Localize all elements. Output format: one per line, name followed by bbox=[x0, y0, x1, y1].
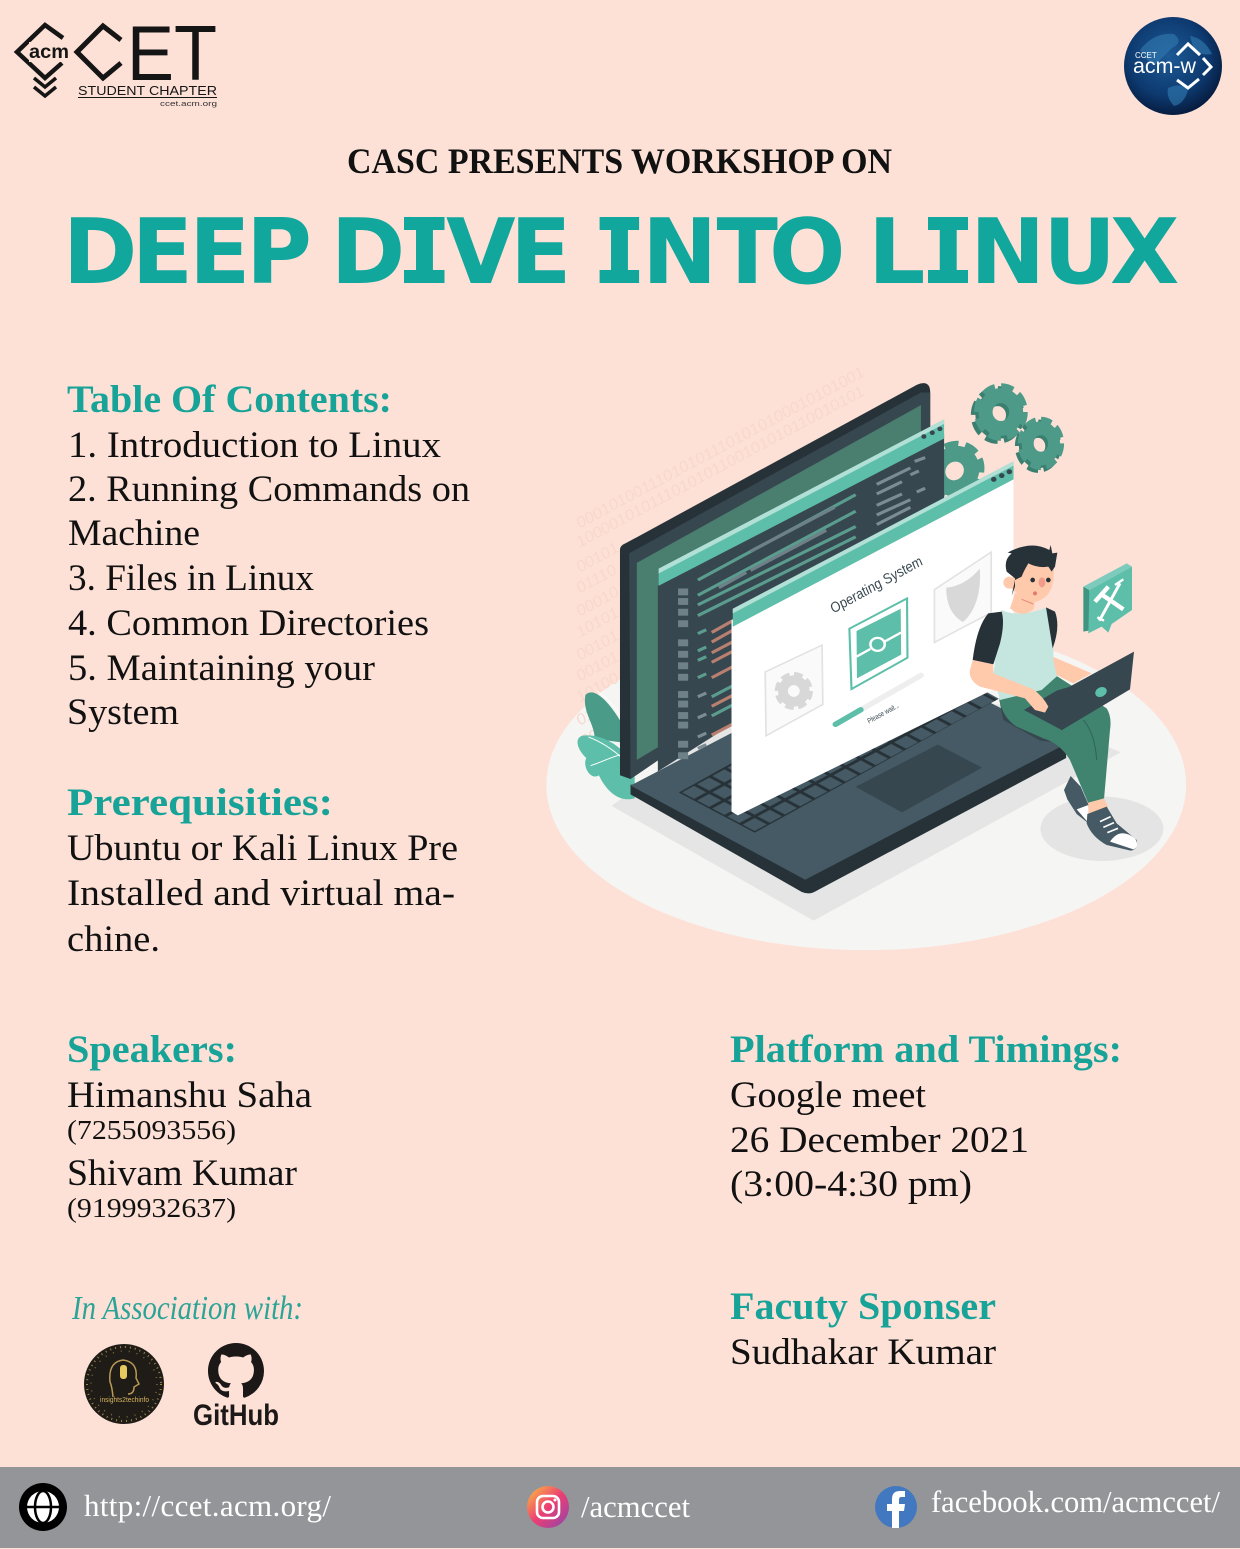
binary digits background: 01110 bbox=[573, 562, 620, 597]
list of topics: 2. Running Commands on bbox=[68, 469, 470, 510]
thigh shadow on laptop bbox=[999, 700, 1067, 743]
speaker one: (7255093556) bbox=[67, 1115, 236, 1145]
speaker two: Shivam Kumar bbox=[67, 1153, 297, 1194]
heading: faculty sponsor: Facuty Sponser bbox=[730, 1285, 996, 1328]
platform details: 26 December 2021 bbox=[730, 1120, 1029, 1161]
icon: gear box bbox=[765, 645, 823, 736]
subtitle: CASC PRESENTS WORKSHOP ON bbox=[347, 141, 892, 181]
icon: central system box bbox=[849, 598, 907, 689]
progress bar bbox=[835, 675, 921, 725]
sleeve bbox=[973, 612, 1003, 664]
code lines bbox=[698, 458, 925, 748]
title: DEEP DIVE INTO LINUX bbox=[63, 200, 1179, 305]
binary digits background: 001 bbox=[577, 722, 611, 750]
binary digits background: 00101 bbox=[573, 627, 622, 664]
binary digits background bbox=[573, 364, 868, 750]
panel: prerequisites bbox=[67, 781, 458, 960]
binary digits background: 00101 bbox=[573, 648, 622, 685]
heading: speakers: Speakers: bbox=[67, 1028, 237, 1071]
torso bbox=[993, 607, 1058, 700]
near shoe bbox=[1087, 807, 1137, 851]
heading: platform and timings: Platform and Timings: bbox=[730, 1028, 1122, 1071]
head bbox=[1003, 545, 1057, 604]
sponsor name: Sudhakar Kumar bbox=[730, 1332, 996, 1373]
list of topics: 5. Maintaining your bbox=[68, 648, 375, 689]
laptop screen bbox=[1061, 652, 1134, 731]
floor ellipse bbox=[546, 619, 1186, 950]
panel: platform and timings bbox=[730, 1028, 1122, 1205]
gear top right bbox=[1018, 420, 1061, 469]
logo: ACM-W globe bbox=[1124, 17, 1222, 115]
laptop shadow bbox=[612, 704, 1121, 921]
panel: faculty sponsor bbox=[730, 1285, 996, 1373]
instagram handle: /acmccet bbox=[581, 1489, 690, 1524]
foot shadow bbox=[1040, 797, 1163, 861]
list of topics: 1. Introduction to Linux bbox=[68, 425, 442, 466]
legs bbox=[999, 676, 1111, 803]
list of topics: System bbox=[67, 692, 179, 733]
binary digits background: 10101 bbox=[573, 604, 622, 641]
front operating system window bbox=[732, 461, 1014, 815]
binary digits background: 100001010111010101100101010110010101 bbox=[573, 383, 868, 551]
binary digits background: 000101001110101011101010100010101001 bbox=[573, 364, 868, 532]
logo: ACM CCET student chapter: ET bbox=[127, 9, 217, 97]
icon: shield box bbox=[934, 552, 991, 642]
icon: instagram bbox=[527, 1486, 569, 1528]
speaker two: (9199932637) bbox=[67, 1193, 236, 1223]
keyboard bbox=[679, 657, 999, 833]
laptop base bbox=[630, 651, 1068, 893]
laptop scene bbox=[546, 364, 1186, 950]
plant bbox=[578, 691, 635, 799]
gear behind bbox=[921, 438, 988, 504]
logo: GitHub: GitHub bbox=[193, 1399, 279, 1432]
panel: speakers bbox=[67, 1028, 312, 1223]
logo: ACM CCET student chapter: STUDENT CHAPTER bbox=[78, 83, 217, 98]
prerequisites text: Installed and virtual ma- bbox=[67, 873, 455, 914]
prerequisites text: Ubuntu or Kali Linux Pre bbox=[67, 828, 458, 869]
logo: ACM CCET student chapter: ccet.acm.org bbox=[160, 99, 217, 108]
list of topics: 3. Files in Linux bbox=[68, 558, 314, 599]
binary digits background: 10100 bbox=[573, 669, 622, 706]
progress bar: Please wait... bbox=[865, 701, 901, 725]
laptop keyboard side bbox=[1024, 687, 1070, 730]
heading: table of contents: Table Of Contents: bbox=[67, 378, 392, 421]
binary digits background: 00101 bbox=[573, 539, 622, 576]
left arm bbox=[970, 660, 1048, 713]
logo: ACM CCET student chapter: acm bbox=[29, 42, 69, 63]
panel: table of contents bbox=[67, 378, 470, 733]
list of topics: Machine bbox=[68, 513, 200, 554]
platform details: (3:00-4:30 pm) bbox=[730, 1164, 972, 1205]
logo: insights2techinfo bbox=[84, 1344, 164, 1424]
speaker two bbox=[67, 1153, 297, 1223]
prerequisites text: chine. bbox=[67, 919, 160, 960]
binary digits background: 00010 bbox=[573, 583, 622, 620]
floating tools badge bbox=[1083, 563, 1132, 633]
gear top left bbox=[975, 387, 1024, 440]
logo: GitHub bbox=[193, 1343, 279, 1432]
platform details bbox=[730, 1075, 1029, 1205]
heading: prerequisites: Prerequisities: bbox=[67, 781, 333, 824]
right arm bbox=[1053, 657, 1092, 683]
icon: globe bbox=[19, 1483, 67, 1531]
trackpad bbox=[856, 745, 982, 812]
logo: insights2techinfo: insights2techinfo bbox=[100, 1397, 149, 1404]
icon: facebook bbox=[875, 1486, 917, 1528]
list of topics: 4. Common Directories bbox=[68, 603, 429, 644]
far shoe bbox=[1064, 776, 1089, 824]
list of topics bbox=[67, 425, 470, 733]
speaker one: Himanshu Saha bbox=[67, 1075, 312, 1116]
heading: in association with: In Association with: bbox=[71, 1290, 303, 1327]
logo: ACM-W globe: acm-w bbox=[1133, 55, 1197, 78]
binary digits background: 01 bbox=[573, 705, 598, 729]
footer bar bbox=[0, 1467, 1240, 1548]
website text: http://ccet.acm.org/ bbox=[84, 1488, 331, 1523]
speaker one bbox=[67, 1075, 312, 1145]
prerequisites text bbox=[67, 828, 458, 960]
logo: ACM CCET student chapter bbox=[17, 9, 217, 108]
window title text: Operating System bbox=[827, 554, 926, 617]
illustration: laptop with operating system windows and person bbox=[546, 364, 1186, 950]
neck bbox=[1010, 593, 1035, 614]
middle code window bbox=[658, 419, 944, 771]
facebook address: facebook.com/acmccet/ bbox=[931, 1484, 1220, 1519]
back screen bbox=[620, 383, 930, 779]
platform details: Google meet bbox=[730, 1075, 927, 1116]
logo: ACM-W globe: CCET bbox=[1135, 51, 1157, 60]
person with laptop bbox=[970, 545, 1137, 851]
